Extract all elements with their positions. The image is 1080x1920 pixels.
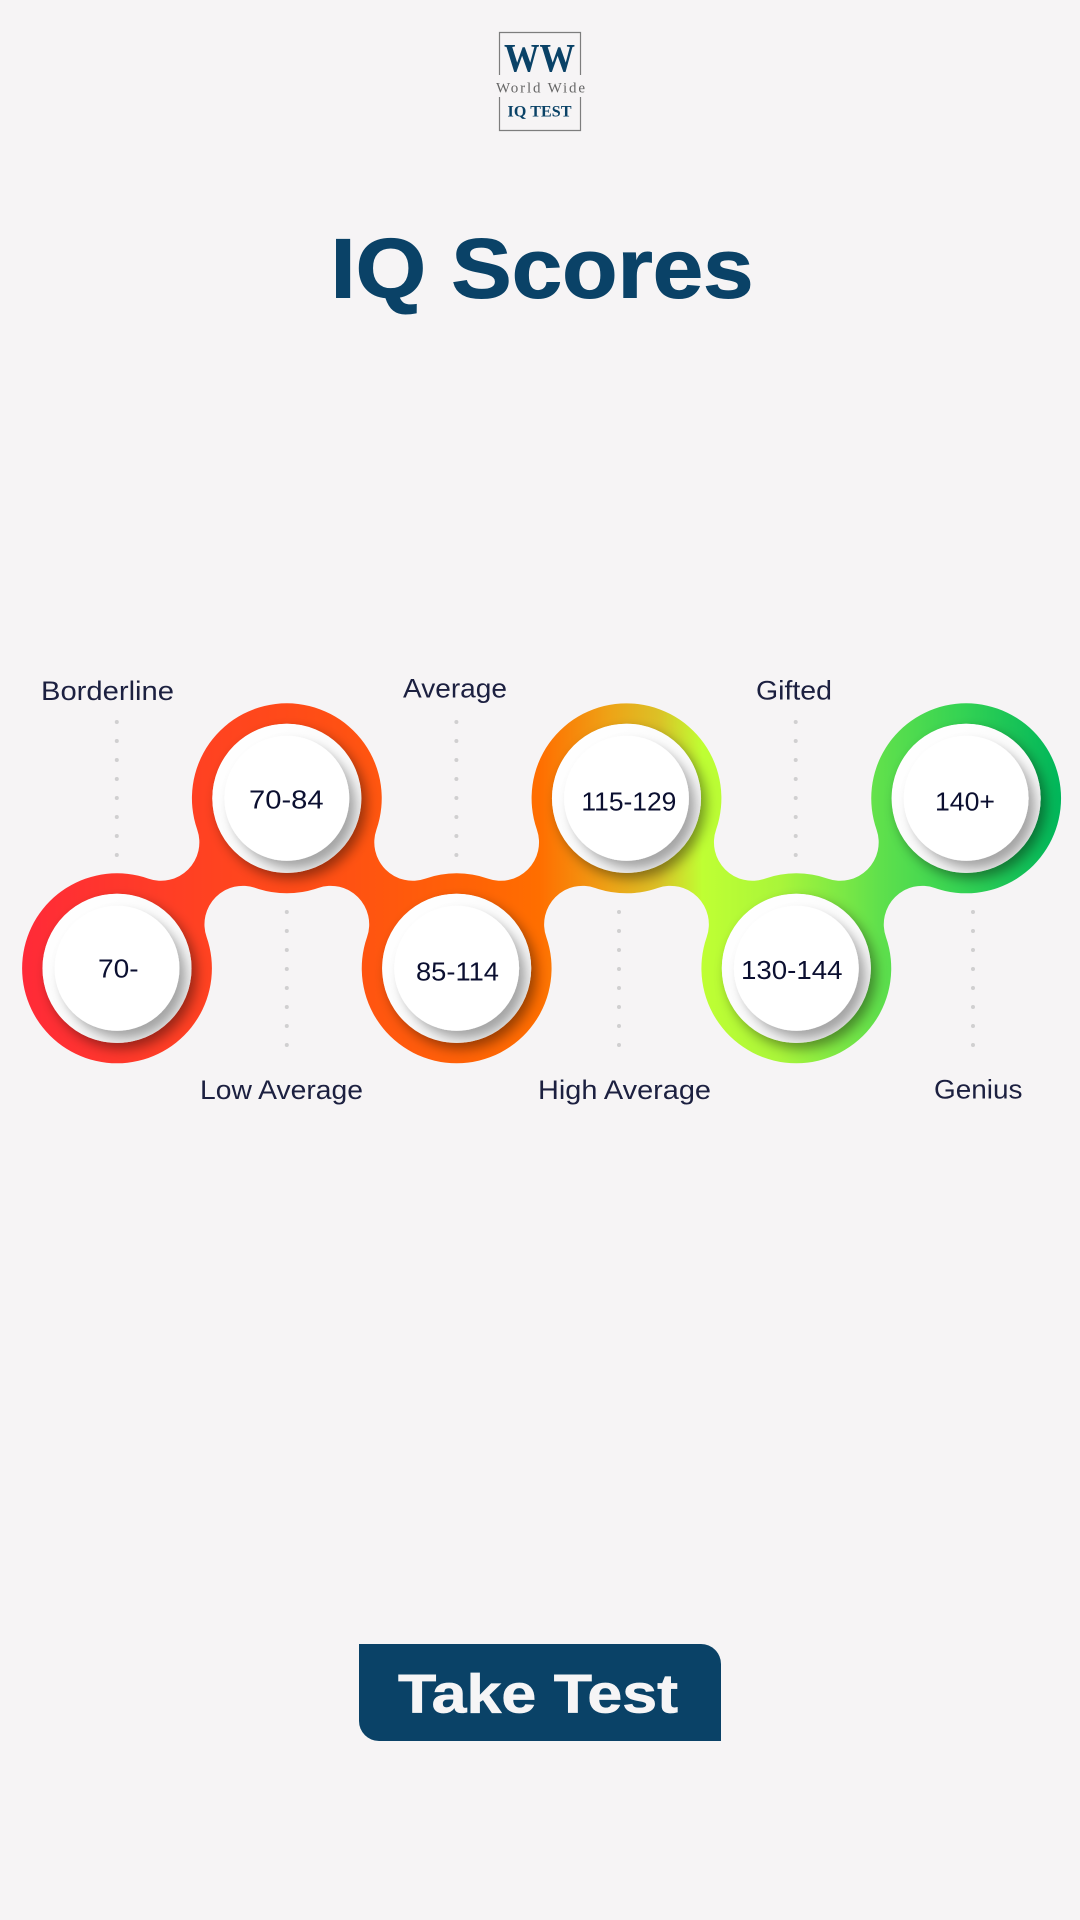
- disc 1: [42, 894, 192, 1043]
- label: High Average: High Average: [538, 1075, 711, 1105]
- dotted leader: High Average: [617, 912, 621, 1046]
- dotted leader: Low Average: [285, 912, 289, 1046]
- button: Take Test: Take Test: [398, 1663, 678, 1725]
- disc 3: [382, 894, 531, 1043]
- label: Low Average: Low Average: [200, 1075, 363, 1105]
- score: 130-144: 130-144: [741, 955, 842, 985]
- title: IQ Scores: [330, 221, 754, 315]
- label: Borderline: Borderline: [41, 676, 174, 706]
- logo: World Wide IQ Test: WW: [504, 36, 575, 80]
- dotted leader: Genius: [971, 912, 975, 1046]
- label: Gifted: Gifted: [756, 675, 832, 705]
- label: Average: Average: [403, 674, 507, 704]
- disc 4: [552, 724, 701, 873]
- disc 5: [722, 894, 871, 1043]
- chart: IQ score ribbon: [22, 703, 1061, 1063]
- score: 70-: 70-: [98, 954, 139, 984]
- button: Take Test: [359, 1644, 721, 1741]
- dotted leader: Gifted: [794, 722, 798, 856]
- dotted leader: Borderline: [115, 722, 119, 856]
- disc 6: [892, 724, 1041, 873]
- ribbon shadows under discs: [42, 724, 1041, 1043]
- disc 2: [212, 724, 361, 873]
- logo: World Wide IQ Test: [496, 32, 585, 130]
- score: 140+: 140+: [935, 787, 995, 817]
- dotted leader: Average: [454, 722, 458, 856]
- ribbon shape: [22, 703, 1061, 1063]
- label: Genius: Genius: [934, 1075, 1022, 1105]
- logo: World Wide IQ Test: World Wide: [496, 80, 585, 96]
- score: 85-114: 85-114: [416, 957, 499, 987]
- score: 70-84: 70-84: [249, 784, 324, 814]
- score: 115-129: 115-129: [581, 787, 676, 817]
- logo: World Wide IQ Test: IQ TEST: [508, 104, 572, 121]
